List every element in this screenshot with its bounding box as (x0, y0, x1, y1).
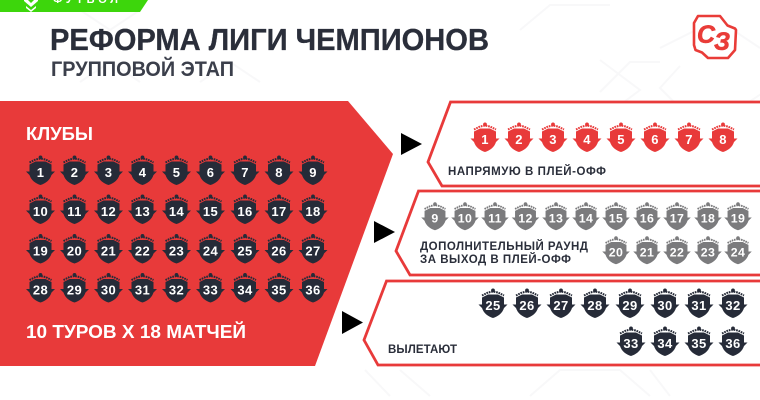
badges: 36 clubs: 30 (101, 282, 116, 298)
badges: 36 clubs: 32 (169, 282, 184, 298)
badges: 36 clubs: 20 (67, 244, 82, 258)
panel: extra round (396, 191, 760, 275)
badges: 36 clubs: 23 (169, 244, 184, 258)
badges: 25 to 36: 32 (725, 298, 741, 313)
badges: 36 clubs (26, 156, 328, 302)
badges: 9 to 24: 17 (670, 212, 684, 226)
badges: 1 to 8: 8 (719, 132, 727, 147)
badges: 36 clubs: 12 (101, 204, 116, 219)
badges: 9 to 24: 22 (670, 246, 684, 260)
badges: 9 to 24: 19 (731, 212, 745, 226)
badges: 1 to 8: 6 (651, 132, 659, 147)
badges: 36 clubs: 27 (305, 244, 321, 258)
heading: clubs: КЛУБЫ (26, 123, 93, 144)
badges: 36 clubs: 22 (135, 244, 150, 258)
badges: 36 clubs: 8 (275, 165, 283, 180)
badges: 36 clubs: 11 (67, 204, 82, 219)
badges: 9 to 24 (421, 202, 752, 264)
badges: 36 clubs: 7 (241, 165, 249, 180)
badges: 1 to 8: 1 (481, 132, 489, 147)
badges: 9 to 24: 21 (640, 246, 654, 260)
arrow: to eliminated (342, 311, 363, 334)
badges: 36 clubs: 2 (71, 165, 78, 180)
logo: С (697, 21, 716, 49)
title: РЕФОРМА ЛИГИ ЧЕМПИОНОВ (50, 22, 489, 57)
badges: 9 to 24: 14 (579, 212, 593, 226)
badges: 25 to 36: 31 (691, 298, 707, 313)
badges: 9 to 24: 24 (731, 246, 745, 260)
badges: 9 to 24: 15 (609, 212, 623, 226)
badges: 36 clubs: 21 (101, 244, 116, 258)
badges: 36 clubs: 31 (135, 282, 150, 298)
badges: 9 to 24: 12 (518, 212, 533, 226)
badges: 25 to 36: 35 (691, 336, 707, 351)
badges: 36 clubs: 18 (305, 204, 321, 219)
label: extra round: ЗА ВЫХОД В ПЛЕЙ-ОФФ (420, 253, 571, 266)
badges: 36 clubs: 4 (139, 165, 147, 180)
badges: 36 clubs: 25 (237, 244, 253, 258)
label: extra round: ДОПОЛНИТЕЛЬНЫЙ РАУНД (420, 240, 588, 253)
badges: 36 clubs: 34 (237, 282, 253, 298)
panel: direct to playoff (428, 102, 760, 186)
badges: 9 to 24: 10 (458, 212, 472, 226)
badges: 36 clubs: 6 (207, 165, 214, 180)
badges: 25 to 36: 29 (622, 298, 638, 313)
label: direct to playoff: НАПРЯМУЮ В ПЛЕЙ-ОФФ (448, 165, 606, 178)
green brand bar (0, 0, 148, 12)
badges: 36 clubs: 9 (309, 165, 317, 180)
icon: brand mark (24, 0, 38, 12)
badges: 36 clubs: 14 (169, 204, 184, 219)
badges: 9 to 24: 9 (431, 212, 439, 226)
badges: 25 to 36: 28 (587, 298, 603, 313)
badges: 25 to 36: 27 (553, 298, 569, 313)
badges: 25 to 36: 34 (657, 336, 673, 351)
arrow: to extra round (374, 221, 395, 243)
badges: 25 to 36: 33 (623, 336, 639, 351)
badges: 1 to 8 (470, 122, 738, 152)
badges: 36 clubs: 35 (271, 282, 287, 298)
badges: 9 to 24: 23 (701, 246, 715, 260)
badges: 25 to 36: 25 (485, 298, 501, 313)
badges: 25 to 36: 36 (725, 336, 741, 351)
badges: 25 to 36 (478, 288, 748, 356)
badges: 1 to 8: 2 (515, 132, 523, 147)
badges: 36 clubs: 15 (203, 204, 218, 219)
badges: 9 to 24: 18 (701, 212, 715, 226)
badges: 36 clubs: 1 (37, 165, 44, 180)
badges: 36 clubs: 19 (33, 244, 48, 258)
panel: clubs (0, 101, 393, 366)
arrow: to direct playoff (401, 133, 422, 155)
badges: 1 to 8: 5 (617, 132, 625, 147)
badges: 36 clubs: 16 (237, 204, 253, 219)
badges: 25 to 36: 26 (519, 298, 535, 313)
badges: 36 clubs: 36 (305, 282, 321, 298)
badges: 36 clubs: 24 (203, 244, 218, 258)
panel: eliminated (364, 281, 760, 365)
badges: 36 clubs: 33 (203, 282, 218, 298)
badges: 25 to 36: 30 (657, 298, 673, 313)
badges: 36 clubs: 26 (271, 244, 287, 258)
badges: 9 to 24: 20 (609, 246, 623, 260)
badges: 9 to 24: 16 (640, 212, 654, 226)
label: eliminated: ВЫЛЕТАЮТ (388, 344, 457, 356)
badges: 36 clubs: 29 (67, 282, 82, 298)
badges: 9 to 24: 11 (488, 212, 502, 226)
badges: 36 clubs: 13 (135, 204, 150, 219)
badges: 1 to 8: 3 (549, 132, 557, 147)
badges: 1 to 8: 4 (583, 132, 591, 147)
logo: З (714, 28, 730, 56)
badges: 36 clubs: 3 (105, 165, 112, 180)
caption: rounds and matches: 10 ТУРОВ Х 18 МАТЧЕЙ (26, 321, 246, 342)
logo (694, 16, 736, 58)
subtitle: ГРУППОВОЙ ЭТАП (51, 57, 234, 81)
badges: 9 to 24: 13 (549, 212, 563, 226)
badges: 36 clubs: 17 (271, 204, 287, 219)
badges: 1 to 8: 7 (685, 132, 693, 147)
badges: 36 clubs: 28 (33, 282, 48, 298)
label: extra round (420, 240, 588, 266)
badges: 36 clubs: 10 (33, 204, 48, 219)
badges: 36 clubs: 5 (173, 165, 180, 180)
